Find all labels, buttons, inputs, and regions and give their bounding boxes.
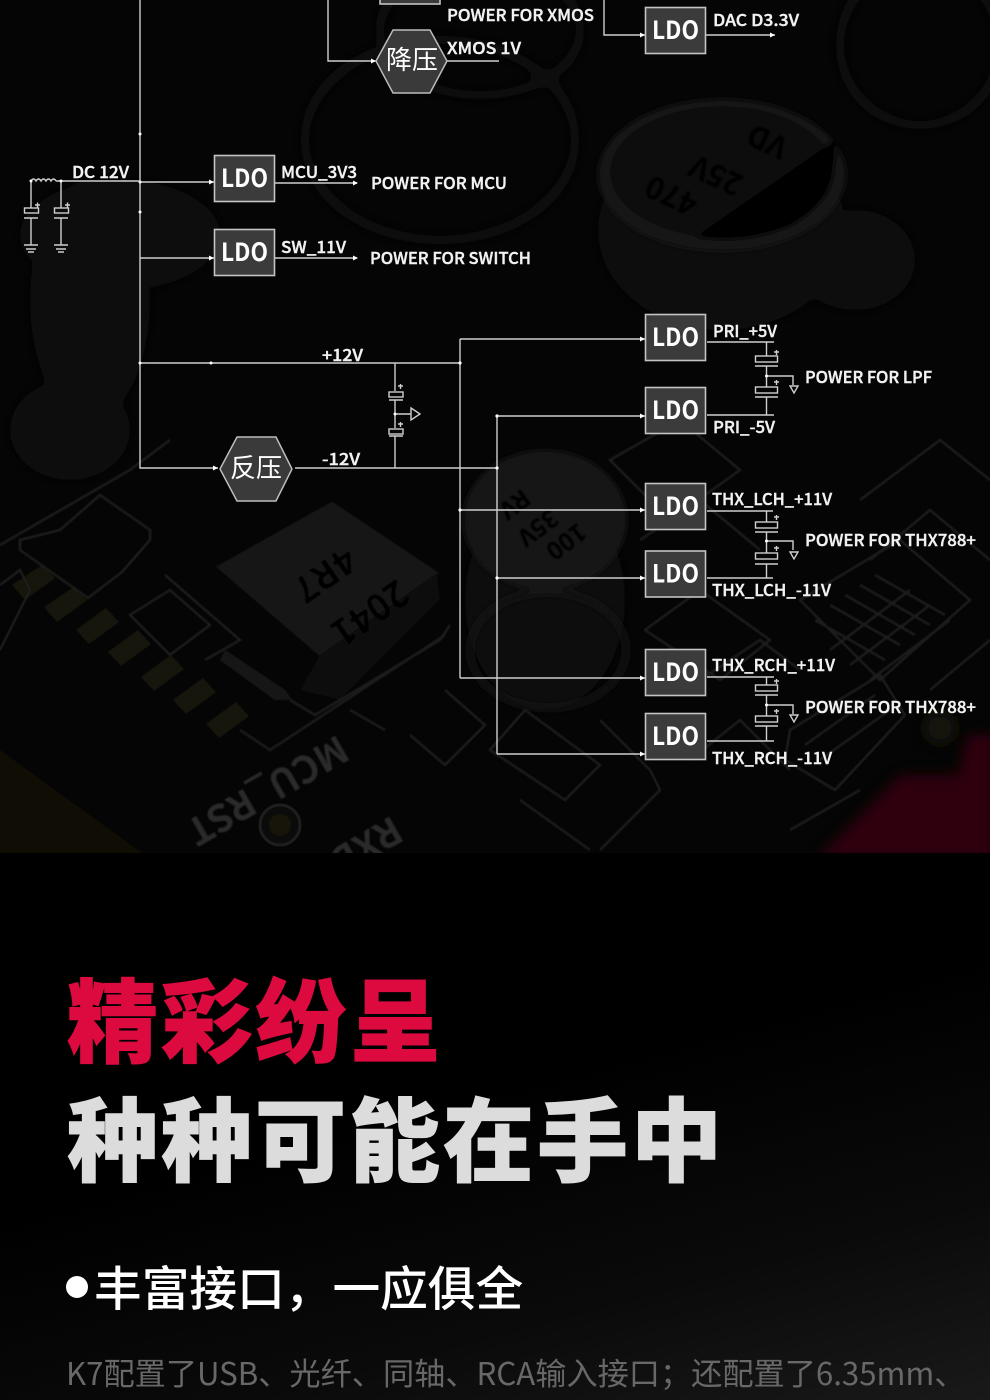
background: dark circuit board photo: RV	[493, 482, 539, 529]
background: inductor: 4R7	[284, 536, 369, 617]
subheading: 丰富接口，一应俱全	[94, 1251, 523, 1320]
capacitor pair on 12V rail	[389, 363, 420, 468]
LDO: THX left -11V: LDO	[652, 554, 699, 590]
background: dark circuit board photo: 100	[540, 516, 595, 570]
background: dark circuit board photo	[0, 0, 990, 891]
panel: power supply circuit diagram	[0, 0, 990, 853]
LDO: DAC D3.3V: LDO	[652, 11, 699, 47]
LDO: PRI +5V	[646, 314, 706, 360]
hexagon: step-down converter	[376, 30, 447, 93]
label: DC 12V: DC 12V	[72, 159, 130, 183]
capacitors: THX right supply	[707, 677, 798, 741]
background: dark circuit board photo: VD	[739, 115, 795, 172]
input filter: inductor and capacitors	[24, 179, 140, 252]
capacitors: LPF supply	[707, 342, 798, 415]
label: POWER FOR SWITCH: POWER FOR SWITCH	[370, 245, 531, 269]
LDO: THX right +11V: LDO	[652, 653, 699, 689]
LDO: PRI +5V: LDO	[652, 318, 699, 354]
LDO: THX left +11V	[646, 484, 706, 530]
LDO: switch: LDO	[221, 233, 268, 269]
label: SW_11V: SW_11V	[281, 234, 347, 258]
label: DAC D3.3V: DAC D3.3V	[713, 7, 800, 31]
label: THX_LCH_-11V: THX_LCH_-11V	[712, 577, 832, 601]
label: THX_LCH_+11V: THX_LCH_+11V	[712, 486, 833, 510]
body text: K7配置了USB、光纤、同轴、RCA输入接口；还配置了6.35mm、	[66, 1349, 965, 1394]
label: POWER FOR THX788+ right: POWER FOR THX788+	[805, 694, 976, 718]
label: XMOS 1V: XMOS 1V	[447, 35, 522, 59]
background: inductor	[218, 503, 440, 700]
background: inductor: 2041	[321, 569, 421, 660]
background: dark circuit board photo: 470	[637, 166, 704, 229]
capacitors: THX left supply	[707, 511, 798, 578]
hexagon: inverting converter	[220, 437, 292, 501]
LDO: PRI -5V: LDO	[652, 391, 699, 427]
label: THX_RCH_+11V: THX_RCH_+11V	[712, 652, 835, 676]
hexagon: step-down converter: 降压	[386, 40, 438, 77]
top power rail wiring	[140, 0, 775, 754]
LDO top partial box	[380, 0, 440, 4]
label: +12V: +12V	[322, 342, 364, 366]
wiring junction dots and arrowheads	[138, 32, 775, 756]
LDO: THX right +11V	[646, 650, 706, 696]
hexagon: inverting converter: 反压	[230, 448, 282, 485]
LDO: THX right -11V	[646, 714, 706, 760]
LDO: MCU: LDO	[221, 159, 268, 195]
label: -12V: -12V	[322, 446, 361, 470]
label: PRI_-5V: PRI_-5V	[713, 414, 776, 438]
LDO: MCU	[214, 156, 274, 202]
LDO: PRI -5V	[646, 388, 706, 434]
label: PRI_+5V: PRI_+5V	[713, 318, 778, 342]
LDO: THX left +11V: LDO	[652, 487, 699, 523]
LDO: DAC D3.3V	[646, 8, 706, 54]
label: THX_RCH_-11V: THX_RCH_-11V	[712, 745, 833, 769]
LDO: THX right -11V: LDO	[652, 717, 699, 753]
background: dark circuit board photo: 25V	[681, 146, 749, 209]
label: POWER FOR THX788+ left: POWER FOR THX788+	[805, 527, 976, 551]
heading: white title: 种种可能在手中	[67, 1069, 725, 1201]
label: MCU_3V3: MCU_3V3	[281, 159, 357, 183]
background: dark circuit board photo: 35V	[511, 502, 567, 556]
LDO: switch	[214, 230, 274, 276]
bullet dot	[66, 1276, 88, 1298]
label: POWER FOR LPF: POWER FOR LPF	[805, 364, 932, 388]
label: POWER FOR XMOS: POWER FOR XMOS	[447, 2, 594, 26]
panel: feature text section	[0, 853, 990, 1400]
LDO: THX left -11V	[646, 551, 706, 597]
label: POWER FOR MCU: POWER FOR MCU	[371, 170, 507, 194]
heading: red title: 精彩纷呈	[67, 950, 444, 1082]
